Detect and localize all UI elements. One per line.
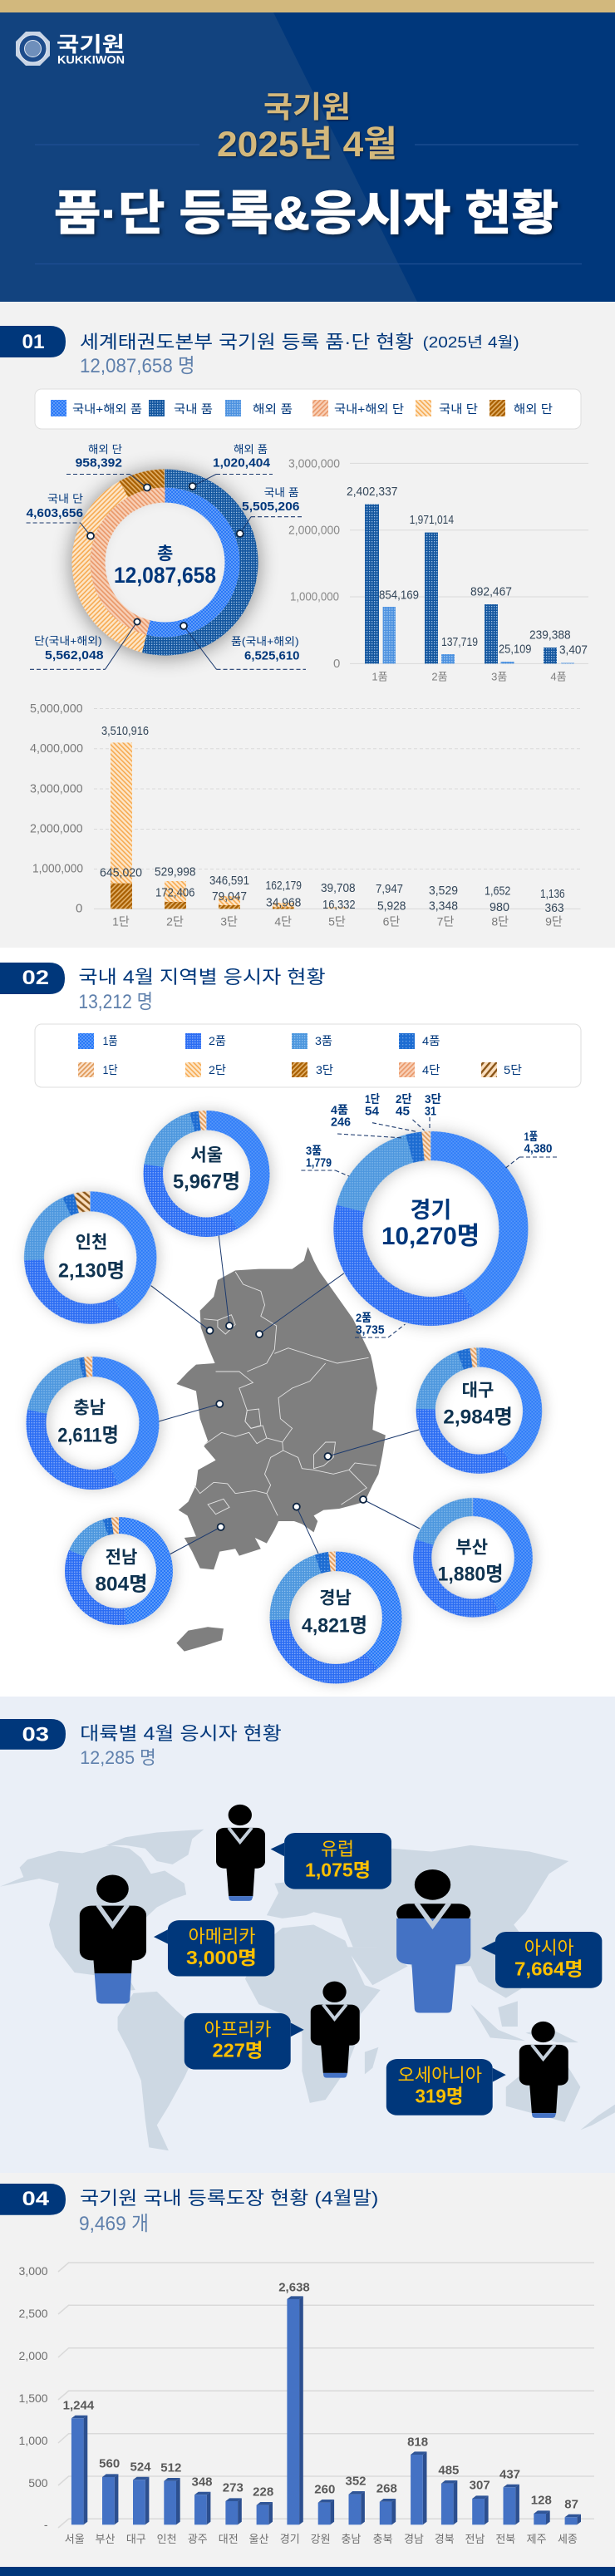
stacked bar chart: dan by grade: 5,000,000	[30, 702, 83, 716]
bottom navy bar	[0, 2567, 615, 2576]
legend: section 02: 4품	[422, 1034, 440, 1047]
stacked bar chart: dan by grade: 3,348	[429, 899, 458, 913]
section 04 heading: 04	[22, 2188, 50, 2210]
3D bar chart: registered dojangs: 2,500	[19, 2307, 48, 2320]
city labels: 인천	[157, 2533, 177, 2545]
stacked bar chart: dan by grade: 79,047	[212, 889, 247, 904]
bar values: 560	[99, 2457, 120, 2471]
donut callout: 국내 단: 4,603,656	[27, 506, 83, 520]
legend: section 01: 국내 품	[174, 402, 213, 416]
donut: 경남: 경남	[319, 1588, 352, 1608]
section background 4	[0, 2173, 615, 2567]
donut centre total	[114, 544, 216, 588]
bar values: 352	[345, 2475, 367, 2489]
legend: section 01: 국내+해외 단	[334, 402, 404, 416]
bar values: 307	[470, 2479, 490, 2493]
legend: section 02	[35, 1024, 581, 1087]
legend: section 01: 국내+해외 품	[72, 402, 142, 416]
stacked bar chart: dan by grade: 16,332	[322, 898, 356, 912]
section 01 heading: 01	[22, 331, 45, 353]
stacked bar chart: dan by grade: 4,000,000	[30, 741, 83, 756]
donut centre total: 총	[157, 544, 173, 564]
city labels: 전남	[465, 2533, 485, 2545]
callout: 3단	[425, 1092, 441, 1130]
stacked bar chart: dan by grade: 363	[545, 901, 564, 915]
callout text: 아메리카: 3,000명	[186, 1947, 257, 1968]
stacked bar chart: dan by grade: 39,708	[321, 881, 356, 895]
callout: 2단	[396, 1092, 425, 1130]
callout: 4품: 4품	[331, 1103, 348, 1116]
section 04 heading: 9,469 개	[79, 2213, 149, 2235]
bar values: 437	[499, 2468, 520, 2482]
donut callout: 단(국내+해외): 5,562,048	[45, 648, 104, 662]
donut: 인천: 2,130명	[58, 1259, 125, 1282]
section 02 heading: 13,212 명	[78, 991, 153, 1013]
donut: 충남: 충남	[73, 1398, 106, 1417]
icon: person Asia	[396, 1869, 470, 2013]
stacked bar chart: dan by grade: 6단	[383, 914, 400, 928]
donut callout: 해외 품	[189, 443, 273, 490]
legend: section 01	[35, 389, 581, 429]
bar values: 128	[531, 2494, 552, 2508]
donut: 경기: 10,270명	[381, 1223, 480, 1250]
section background 1	[0, 302, 615, 948]
stacked bar chart: dan by grade: 7단	[437, 914, 454, 928]
icon: person Europe	[216, 1805, 265, 1901]
section 03 heading	[0, 1719, 282, 1768]
bar values: 228	[253, 2485, 273, 2500]
stacked bar chart: dan by grade	[30, 702, 580, 928]
donut: 전남: 804명	[95, 1574, 148, 1596]
section background 3	[0, 1697, 615, 2173]
callout: 3품: 1,779	[306, 1155, 332, 1170]
bar values: 818	[407, 2436, 428, 2450]
stacked bar chart: dan by grade: 645,020	[100, 866, 142, 879]
logo: Kukkiwon: 국기원	[57, 33, 125, 57]
section 01 heading: (2025년 4월)	[423, 334, 519, 351]
callout text: 아프리카	[204, 2019, 271, 2061]
bar values	[63, 2281, 578, 2512]
donut: 경남: 4,821명	[302, 1615, 367, 1638]
stacked bar chart: dan by grade: 1,652	[485, 884, 510, 898]
gold top band	[0, 0, 615, 12]
bar values: 273	[223, 2481, 244, 2495]
section 01 heading: 세계태권도본부 국기원 등록 품·단 현황	[80, 332, 414, 352]
donut: 서울	[153, 1121, 260, 1227]
city labels: 강원	[311, 2533, 331, 2545]
section 03 heading: 대륙별 4월 응시자 현황	[80, 1723, 282, 1744]
donut: 전남	[73, 1525, 165, 1617]
people icons	[80, 1805, 568, 2118]
donut: 서울: 서울	[190, 1146, 223, 1165]
callout: 1단: 1단	[365, 1092, 380, 1106]
section 01 heading: 12,087,658 명	[80, 355, 194, 377]
stacked bar chart: dan by grade: 5단	[328, 914, 346, 928]
bar chart: pum by grade: 3,407	[559, 643, 588, 657]
bar chart: pum by grade: 4품	[550, 670, 567, 683]
3D bar chart: registered dojangs	[19, 2263, 594, 2545]
3D bar chart: registered dojangs: 1,000	[19, 2434, 48, 2447]
stacked bar chart: dan by grade: 3,510,916	[101, 724, 149, 738]
section 04 heading: 국기원 국내 등록도장 현황 (4월말)	[80, 2188, 378, 2209]
logo: Kukkiwon	[16, 32, 125, 66]
stacked bar chart: dan by grade: 529,998	[155, 864, 196, 879]
stacked bar chart: dan by grade: 3,000,000	[30, 781, 83, 796]
bar values: 485	[438, 2464, 459, 2478]
section 03 heading: 03	[22, 1724, 49, 1746]
legend: section 02: 1단	[103, 1063, 118, 1076]
donut callout: 단(국내+해외)	[30, 618, 140, 669]
header banner	[0, 12, 615, 302]
donut: 대구	[426, 1357, 533, 1464]
donut: 충남	[36, 1367, 149, 1480]
city labels: 울산	[249, 2533, 268, 2545]
city labels: 광주	[188, 2533, 208, 2545]
donut: 인천: 인천	[76, 1234, 107, 1253]
callout: 2품: 2품	[356, 1311, 371, 1324]
bar values: 260	[314, 2483, 335, 2497]
section 02 heading	[0, 963, 326, 1013]
city labels: 경북	[435, 2533, 455, 2545]
city labels: 전북	[495, 2533, 515, 2545]
callout: 1품: 1품	[524, 1130, 538, 1143]
bar chart: pum by grade: 1,000,000	[290, 590, 339, 603]
donut callout: 해외 단	[66, 443, 150, 490]
callout: 4품: 246	[331, 1116, 351, 1129]
stacked bar chart: dan by grade: 4단	[274, 914, 292, 928]
title: date: 2025년 4월	[217, 125, 397, 165]
stacked bar chart: dan by grade: 980	[490, 900, 509, 914]
stacked bar chart: dan by grade: 162,179	[266, 879, 302, 893]
donut callout: 단(국내+해외): 단(국내+해외)	[34, 635, 102, 647]
donut: 경남	[279, 1561, 392, 1674]
stacked bar chart: dan by grade: 1,136	[540, 887, 565, 901]
stacked bar chart: dan by grade: 7,947	[376, 882, 403, 896]
donut callout: 해외 단: 958,392	[76, 456, 122, 470]
callout text: 아시아: 7,664명	[514, 1958, 583, 1980]
bar chart: pum by grade: 137,719	[441, 635, 478, 649]
3D bar chart: registered dojangs: 1,500	[19, 2391, 48, 2405]
bar values: 524	[130, 2460, 151, 2475]
callout: 1품: 4,380	[524, 1142, 552, 1155]
callout: 2단: 45	[396, 1104, 410, 1119]
3D bar chart: registered dojangs: 2,000	[19, 2349, 48, 2362]
city labels: 경기	[280, 2533, 300, 2545]
callout text: 오세아니아	[397, 2065, 482, 2106]
3D bar chart: registered dojangs: 500	[28, 2476, 48, 2490]
callout: 4품	[331, 1103, 404, 1138]
stacked bar chart: dan by grade: 0	[76, 901, 82, 916]
donut: 인천	[34, 1201, 146, 1314]
city labels: 충남	[341, 2533, 361, 2545]
legend: section 01: 해외 단	[514, 402, 553, 416]
donut: 충남: 2,611명	[57, 1424, 119, 1446]
donut callout: 국내 품: 5,505,206	[242, 500, 299, 514]
donut callout: 국내 단: 국내 단	[47, 492, 83, 505]
callout text: 오세아니아: 319명	[416, 2085, 464, 2106]
section 01 heading	[0, 326, 519, 377]
bar chart: pum by grade: 2,402,337	[347, 485, 397, 499]
legend: section 02: 5단	[504, 1063, 522, 1076]
city labels: 서울	[65, 2533, 85, 2545]
city labels: 대전	[219, 2533, 239, 2545]
donut: 부산: 부산	[455, 1539, 488, 1558]
donut centre total: 12,087,658	[114, 563, 216, 588]
callout: 2품	[355, 1311, 406, 1337]
bar chart: pum by grade: 3,000,000	[288, 457, 340, 470]
bars	[71, 2296, 581, 2524]
3D bar chart: registered dojangs: 3,000	[19, 2264, 48, 2278]
bar chart: pum by grade	[288, 457, 588, 683]
stacked bar chart: dan by grade: 3단	[220, 914, 238, 928]
connector pins	[151, 1236, 420, 1554]
stacked bar chart: dan by grade: 172,406	[155, 886, 194, 899]
stacked bar chart: dan by grade: 3,529	[429, 884, 458, 898]
donut callout: 품(국내+해외)	[180, 623, 306, 669]
donut callout: 해외 단: 해외 단	[88, 443, 122, 456]
stacked bar chart: dan by grade: 2,000,000	[30, 821, 83, 836]
legend: section 01: 해외 품	[253, 402, 293, 416]
section 03 heading: 12,285 명	[80, 1747, 156, 1768]
city labels: 세종	[558, 2533, 578, 2545]
stacked bar chart: dan by grade: 9단	[545, 914, 563, 928]
callout text: 아시아: 아시아	[524, 1938, 574, 1958]
callout: 2단: 2단	[396, 1092, 412, 1106]
callout: 2품: 3,735	[356, 1323, 384, 1337]
stacked bar chart: dan by grade: 5,928	[377, 899, 406, 913]
bar chart: pum by grade: 2,000,000	[288, 524, 340, 537]
section 04 heading	[0, 2184, 378, 2235]
3D bar chart: registered dojangs: -	[44, 2518, 48, 2531]
bar chart: pum by grade: 3품	[491, 670, 507, 683]
bar chart: pum by grade: 239,388	[529, 628, 571, 642]
donut: 대구: 2,984명	[443, 1406, 513, 1429]
donut callout: 국내 품	[237, 486, 304, 537]
donut callout: 해외 품: 1,020,404	[213, 456, 271, 470]
donut callout: 국내 품: 국내 품	[264, 486, 299, 499]
stacked bar chart: dan by grade: 34,968	[266, 896, 301, 909]
world map	[0, 1830, 615, 2150]
callout: 1단	[365, 1092, 418, 1132]
section 02 heading: 02	[22, 967, 49, 989]
stacked bar chart: dan by grade: 2단	[166, 914, 184, 928]
callout text: 오세아니아: 오세아니아	[397, 2065, 482, 2086]
icon: person America	[80, 1874, 146, 2003]
legend: section 02: 4단	[422, 1063, 440, 1076]
icon: person Africa	[311, 1982, 360, 2078]
callout text: 아프리카: 아프리카	[204, 2019, 271, 2040]
stacked bar chart: dan by grade: 346,591	[209, 874, 249, 888]
callout text: 아메리카	[186, 1926, 257, 1968]
donut callout: 해외 품: 해외 품	[234, 443, 268, 456]
legend: section 01: 국내 단	[439, 402, 478, 416]
legend: section 02: 3품	[315, 1034, 332, 1047]
callout: 3품: 3품	[306, 1144, 322, 1157]
legend: section 02: 3단	[316, 1063, 333, 1076]
callout text: 유럽: 1,075명	[305, 1859, 371, 1880]
donut: 경기: 경기	[411, 1198, 451, 1223]
donut callout: 국내 단	[27, 492, 94, 539]
bar chart: pum by grade: 1품	[371, 670, 388, 683]
bar values: 1,244	[63, 2399, 95, 2413]
section background 2	[0, 948, 615, 1697]
city labels	[65, 2533, 578, 2545]
bar values: 87	[564, 2498, 578, 2512]
callout text: 아시아	[514, 1938, 583, 1980]
callout: 3단: 31	[425, 1104, 436, 1119]
stacked bar chart: dan by grade: 8단	[491, 914, 509, 928]
bar values: 268	[376, 2482, 397, 2496]
callout: 1품	[504, 1130, 557, 1170]
bar chart: pum by grade: 892,467	[470, 585, 512, 598]
callout bubbles shapes	[154, 1833, 602, 2115]
callout text: 아메리카: 아메리카	[188, 1926, 256, 1947]
bar values: 2,638	[278, 2281, 310, 2295]
legend: section 02: 1품	[103, 1034, 118, 1047]
callout text: 유럽: 유럽	[321, 1839, 354, 1859]
bar chart: pum by grade: 25,109	[499, 642, 532, 657]
title: organisation: 국기원	[263, 90, 351, 124]
donut: 전남: 전남	[106, 1548, 137, 1567]
city labels: 경남	[404, 2533, 424, 2545]
donut: 부산	[422, 1507, 524, 1608]
city labels: 대구	[126, 2533, 146, 2545]
donut chart: total by pum/dan	[27, 443, 306, 669]
city labels: 충북	[373, 2533, 393, 2545]
bar chart: pum by grade: 1,971,014	[410, 513, 454, 527]
callout: 3단: 3단	[425, 1092, 441, 1106]
donut: 경기	[301, 1092, 557, 1337]
bar chart: pum by grade: 2품	[431, 670, 448, 683]
donut callout: 품(국내+해외): 6,525,610	[244, 648, 299, 663]
legend: section 02: 2단	[209, 1063, 226, 1076]
city labels: 제주	[527, 2533, 547, 2545]
bar values: 512	[160, 2461, 181, 2475]
callout text: 아프리카: 227명	[213, 2040, 263, 2061]
stacked bar chart: dan by grade: 1,000,000	[32, 861, 83, 876]
title: main: 품·단 등록&응시자 현황	[54, 187, 558, 240]
logo: Kukkiwon: KUKKIWON	[57, 53, 125, 66]
callout: 3품	[301, 1144, 349, 1176]
map: South Korea	[176, 1247, 386, 1652]
legend: section 02: 2품	[209, 1034, 226, 1047]
callout: 1단: 54	[365, 1104, 380, 1119]
section 02 heading: 국내 4월 지역별 응시자 현황	[78, 967, 326, 988]
city labels: 부산	[96, 2533, 115, 2545]
donut: 대구: 대구	[462, 1382, 494, 1401]
donut: 부산: 1,880명	[437, 1564, 504, 1586]
stacked bar chart: dan by grade: 1단	[112, 914, 130, 928]
callout text: 유럽	[305, 1839, 371, 1880]
donut: 서울: 5,967명	[173, 1171, 240, 1194]
donut callout: 품(국내+해외): 품(국내+해외)	[231, 635, 299, 648]
icon: person Oceania	[519, 2022, 568, 2118]
bar chart: pum by grade: 0	[333, 657, 340, 671]
bar chart: pum by grade: 854,169	[379, 589, 419, 602]
bar values: 348	[191, 2475, 213, 2490]
